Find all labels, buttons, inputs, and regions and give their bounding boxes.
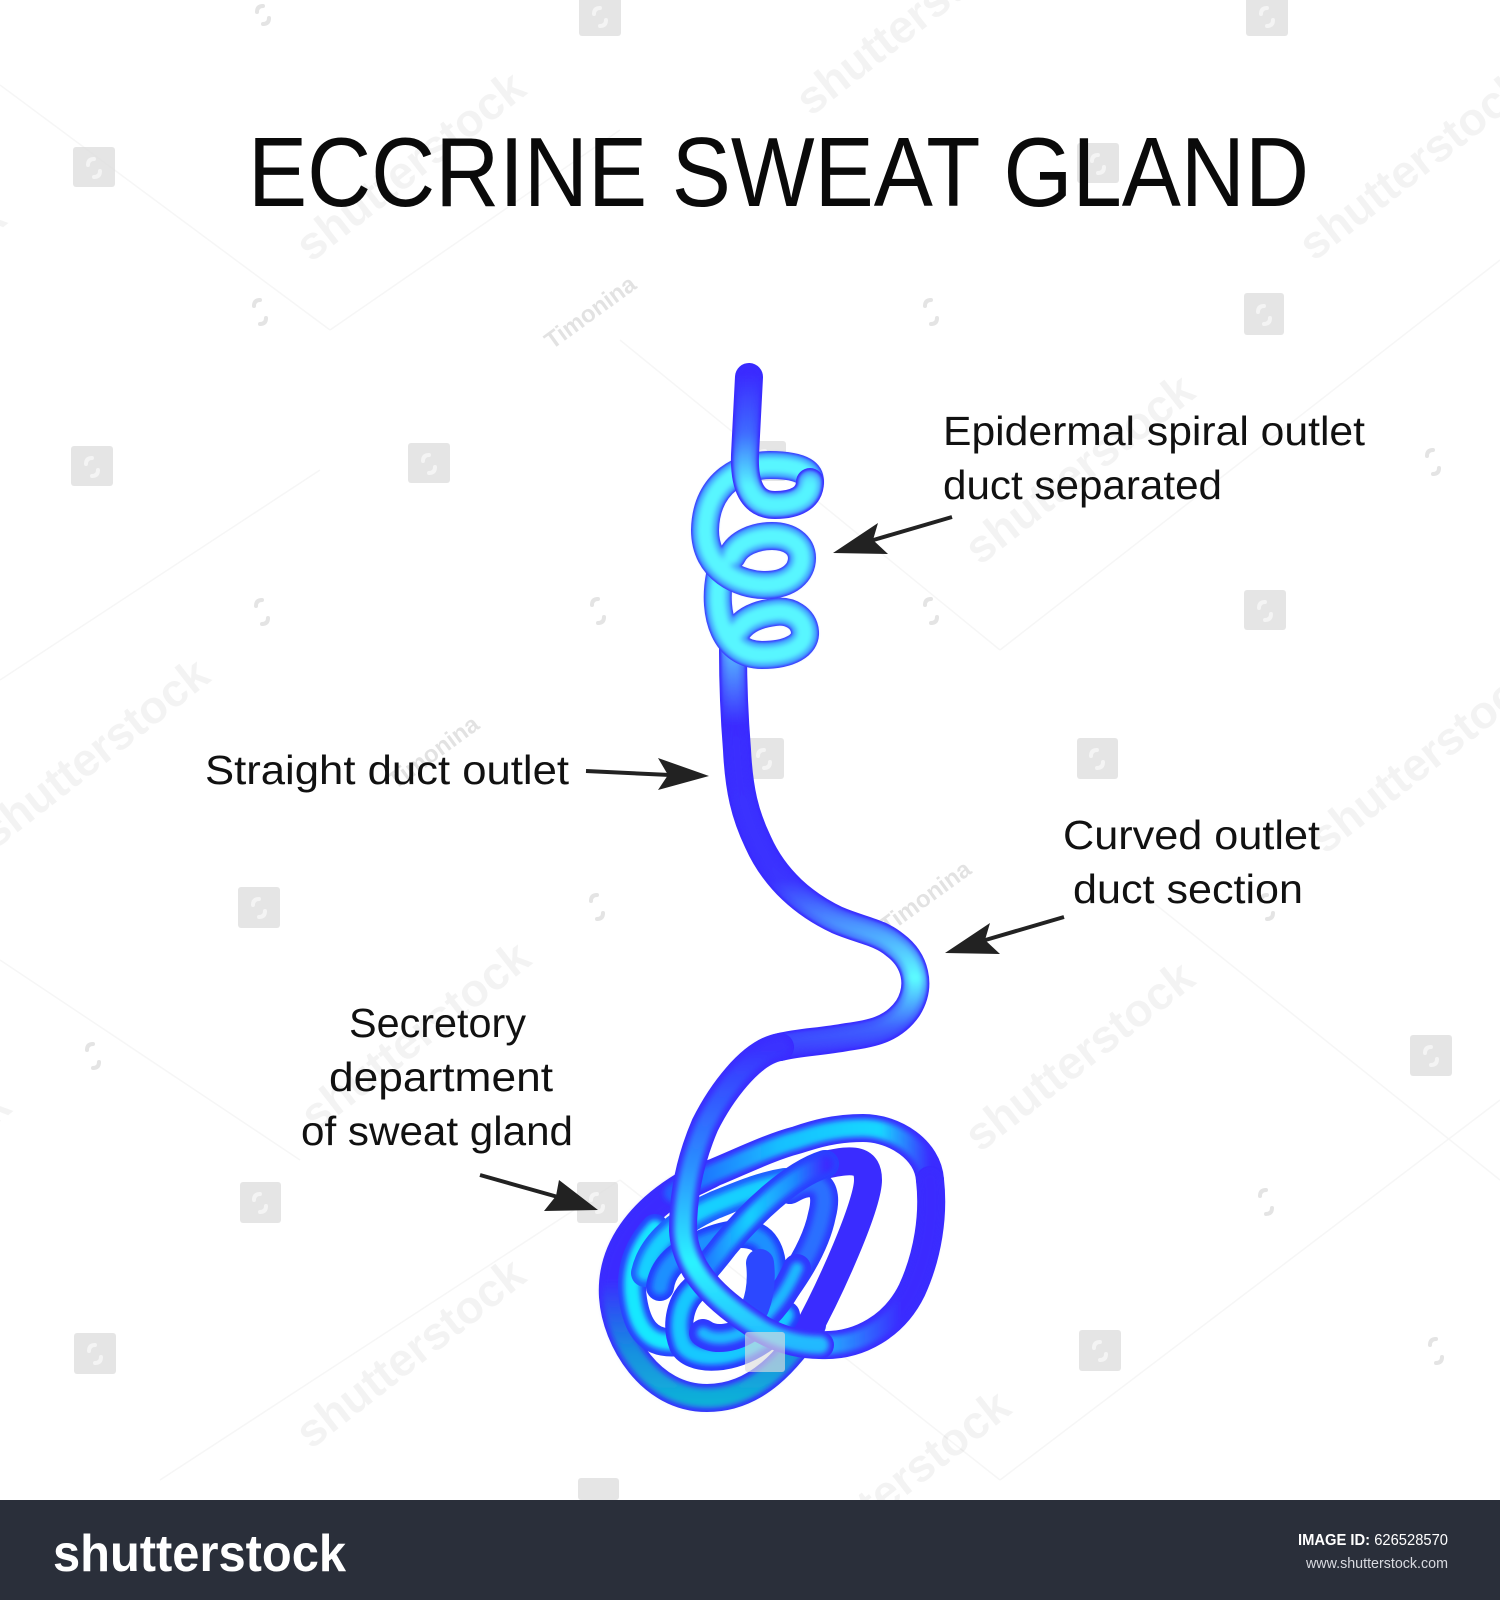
label: curved outlet duct section: duct section xyxy=(1073,866,1303,912)
coil small lower loop xyxy=(679,1287,786,1357)
watermark pattern: shutterstock xyxy=(770,1379,1020,1590)
watermark pattern: shutterstock xyxy=(285,60,535,271)
watermark pattern: Timonina xyxy=(875,855,977,940)
footer logo: shutterstock xyxy=(53,1525,346,1583)
duct illustration: upper part xyxy=(705,377,915,1047)
label: secretory department: department xyxy=(329,1054,554,1100)
footer image id: IMAGE ID: 626528570 xyxy=(1298,1532,1448,1549)
arrow: curved duct xyxy=(945,917,1064,954)
straight and curved duct xyxy=(733,650,915,1047)
arrow: spiral outlet xyxy=(833,517,952,554)
spiral coil three xyxy=(718,575,805,655)
watermark pattern: Timonina xyxy=(540,270,642,355)
arrow: straight duct xyxy=(586,758,709,790)
label: secretory department: of sweat gland xyxy=(301,1108,573,1154)
watermark square over coil xyxy=(745,1332,785,1372)
watermark pattern: shutterstock xyxy=(290,930,540,1141)
coil outer loop xyxy=(613,1182,812,1398)
coil capped band xyxy=(645,1182,785,1273)
label: straight duct outlet: Straight duct outlet xyxy=(205,747,570,793)
watermark pattern: Timonina xyxy=(383,710,485,795)
coil cap tube xyxy=(703,1268,797,1338)
coil inner arc xyxy=(660,1234,772,1318)
spiral stem xyxy=(745,377,810,505)
watermark pattern: shutterstock xyxy=(954,363,1204,574)
label: secretory department xyxy=(301,1000,573,1154)
secretory coil xyxy=(613,1047,931,1398)
coil right inner loop xyxy=(770,1183,824,1310)
coil inner ring xyxy=(632,1228,680,1343)
spiral coil two xyxy=(705,465,810,585)
front of main loop xyxy=(683,1047,820,1345)
watermark pattern: shutterstock xyxy=(285,1247,535,1458)
coil dark diagonal xyxy=(805,1161,868,1335)
title: ECCRINE SWEAT GLAND xyxy=(248,117,1309,227)
watermark pattern: shutterstock xyxy=(954,950,1204,1161)
upper band of main loop xyxy=(673,1128,930,1193)
label: epidermal spiral outlet duct: Epidermal spiral outlet xyxy=(943,408,1366,454)
label: curved outlet duct section: Curved outlet xyxy=(1063,812,1321,858)
label: curved outlet duct section xyxy=(1063,812,1321,912)
right side of main loop xyxy=(820,1180,931,1345)
arrow: secretory department xyxy=(480,1175,598,1211)
footer bar xyxy=(0,1500,1500,1600)
footer url: www.shutterstock.com xyxy=(1305,1555,1448,1572)
label: epidermal spiral outlet duct xyxy=(943,408,1366,508)
label: secretory department: Secretory xyxy=(349,1000,527,1046)
coil short tube xyxy=(755,1263,761,1308)
label: epidermal spiral outlet duct: duct separated xyxy=(943,462,1222,508)
coil diagonal band xyxy=(700,1164,825,1276)
